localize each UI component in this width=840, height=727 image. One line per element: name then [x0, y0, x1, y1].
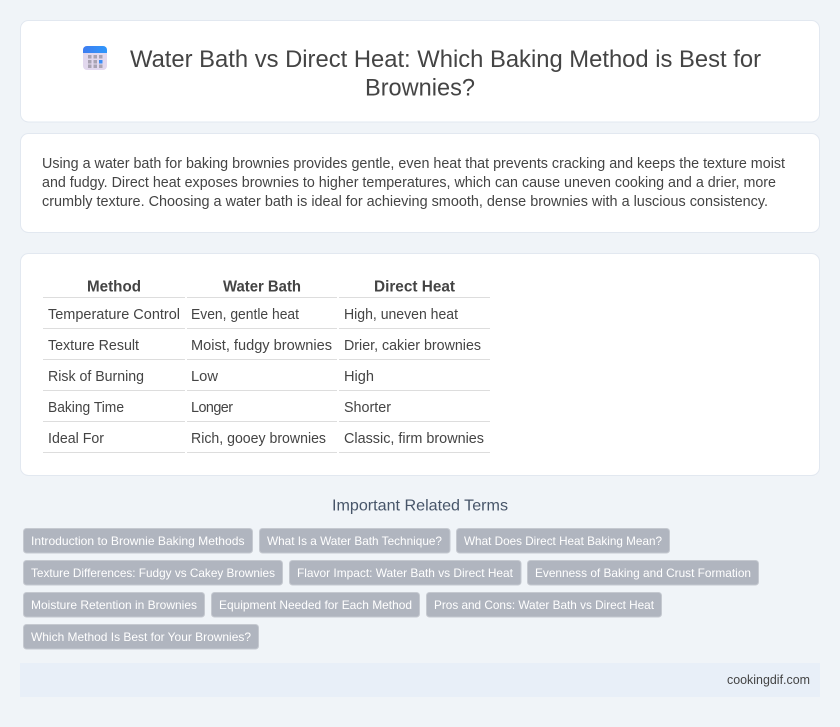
- tag: [290, 560, 521, 585]
- row: risk of burning: Risk of Burning: [48, 369, 144, 385]
- tag: [456, 528, 670, 553]
- panel: header: [20, 20, 820, 122]
- tag: Equipment Needed for Each Method: [219, 598, 412, 612]
- tag: Which Method Is Best for Your Brownies?: [31, 630, 251, 644]
- row: risk of burning: [48, 369, 374, 385]
- row: temperature control: High, uneven heat: [344, 307, 458, 323]
- tag: [24, 528, 252, 553]
- tag: [260, 528, 450, 553]
- row: baking time: Baking Time: [48, 400, 124, 416]
- tag: [212, 592, 420, 617]
- panel: introduction: [20, 134, 820, 232]
- row: baking time: Shorter: [344, 400, 391, 416]
- table header: Water Bath: [223, 278, 301, 296]
- title: Water Bath vs Direct Heat: Which Baking Method is Best for: [130, 46, 761, 73]
- row: texture result: Moist, fudgy brownies: [191, 338, 332, 354]
- table header: [87, 278, 456, 296]
- row: ideal for: Classic, firm brownies: [344, 431, 484, 447]
- tag: [528, 560, 758, 585]
- intro text: and fudgy. Direct heat exposes brownies to higher temperatures, which can cause uneven cooking and a drier, more: [42, 175, 776, 191]
- row: temperature control: Even, gentle heat: [191, 307, 299, 323]
- row: temperature control: [48, 307, 458, 323]
- row: texture result: Texture Result: [48, 338, 139, 354]
- row: risk of burning: Low: [191, 369, 219, 385]
- row: ideal for: Rich, gooey brownies: [191, 431, 326, 447]
- tag: [24, 592, 204, 617]
- title: Brownies?: [365, 74, 475, 102]
- row: baking time: [48, 400, 391, 416]
- tag: [24, 624, 258, 649]
- title: [130, 46, 761, 102]
- table header: Method: [87, 278, 141, 296]
- tag: [24, 560, 282, 585]
- panel: comparison table: [20, 254, 820, 476]
- intro text: crumbly texture. Choosing a water bath is ideal for achieving smooth, dense brownies with a luscious consistency.: [42, 194, 768, 210]
- tag: Pros and Cons: Water Bath vs Direct Heat: [434, 598, 655, 612]
- row: texture result: Drier, cakier brownies: [344, 338, 481, 354]
- tag: Evenness of Baking and Crust Formation: [535, 566, 751, 580]
- tag: Flavor Impact: Water Bath vs Direct Heat: [297, 566, 514, 580]
- row: baking time: Longer: [191, 400, 233, 416]
- footer: [20, 663, 820, 697]
- tag: What Does Direct Heat Baking Mean?: [464, 534, 662, 548]
- icon: calendar: [83, 46, 107, 70]
- tag: What Is a Water Bath Technique?: [267, 534, 442, 548]
- row: texture result: [48, 338, 481, 354]
- row: ideal for: [48, 431, 484, 447]
- intro text: [42, 156, 785, 210]
- tag: Texture Differences: Fudgy vs Cakey Brownies: [31, 566, 275, 580]
- related term tags: [24, 528, 758, 649]
- intro text: Using a water bath for baking brownies provides gentle, even heat that prevents cracking and keeps the texture moist: [42, 156, 785, 172]
- tag: Moisture Retention in Brownies: [31, 598, 197, 612]
- tag: Introduction to Brownie Baking Methods: [31, 534, 244, 548]
- heading: related terms: Important Related Terms: [332, 498, 508, 514]
- footer: cookingdif.com: [727, 672, 810, 687]
- tag: [426, 592, 662, 617]
- table header: Direct Heat: [374, 278, 456, 296]
- row: risk of burning: High: [344, 369, 374, 385]
- row: temperature control: Temperature Control: [48, 307, 180, 323]
- row: ideal for: Ideal For: [48, 431, 104, 447]
